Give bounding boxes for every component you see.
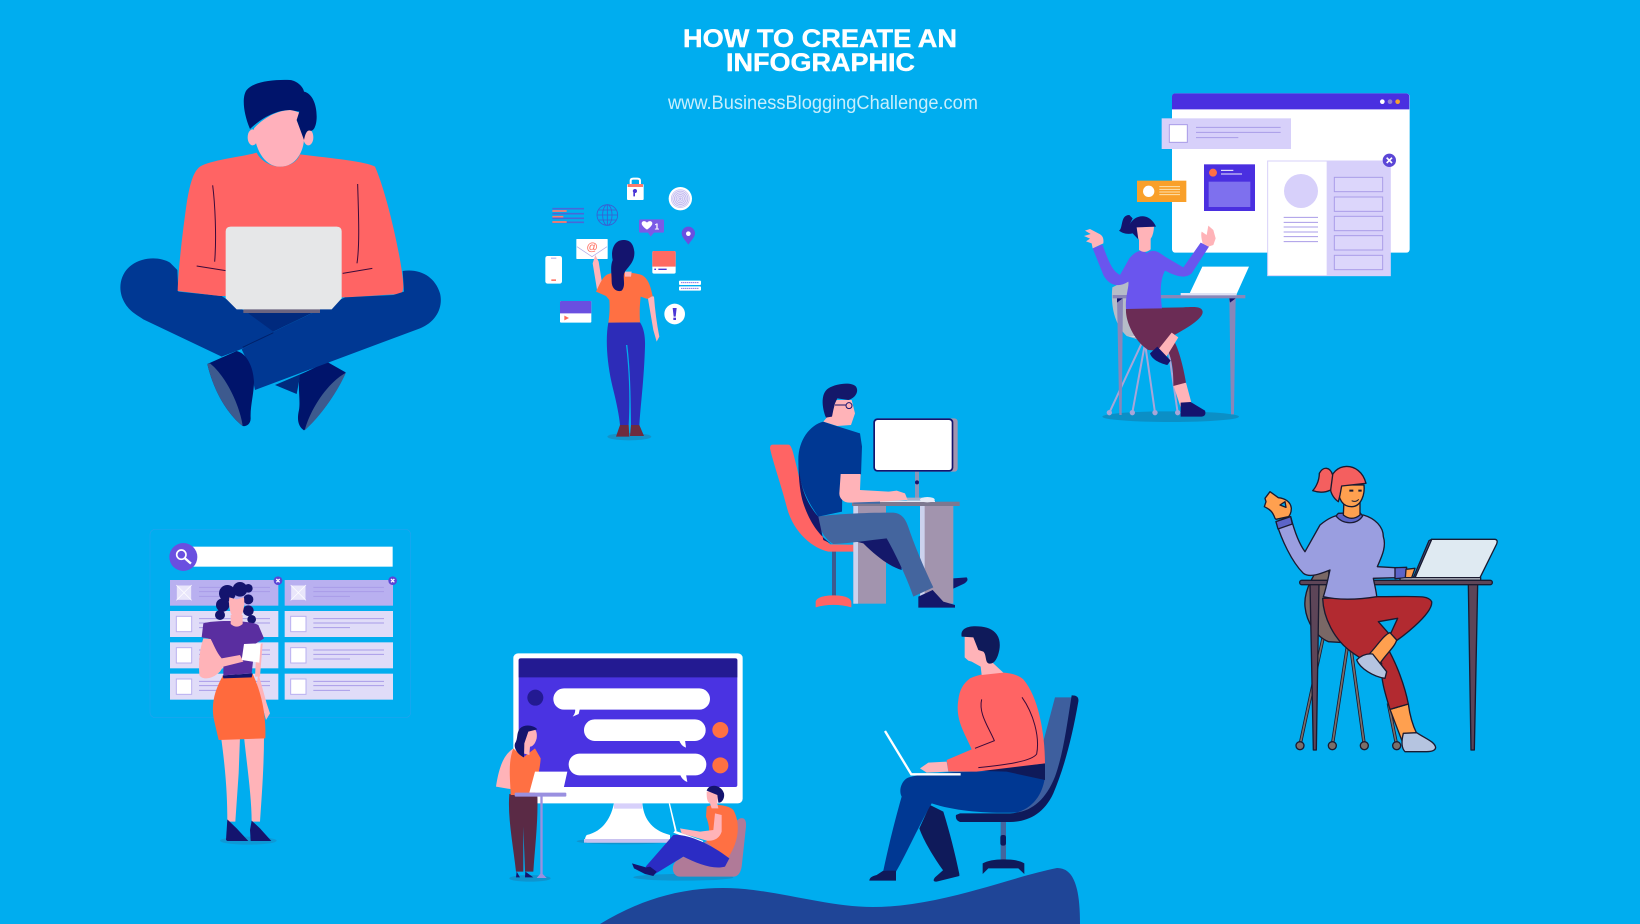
lavender strip card bbox=[1162, 118, 1291, 149]
desk bbox=[852, 502, 960, 604]
wave shape at bottom bbox=[600, 868, 1080, 924]
icon: globe bbox=[597, 205, 618, 225]
purple card bbox=[1204, 164, 1255, 211]
waist bbox=[973, 763, 1045, 780]
illustration: woman with search results panel bbox=[150, 529, 411, 845]
icon: map pin bbox=[682, 227, 695, 245]
icon: fingerprint bbox=[669, 187, 692, 210]
panel outline bbox=[150, 529, 411, 718]
illustration: chat monitor with two people bbox=[496, 653, 746, 882]
sweater crease lines bbox=[197, 184, 372, 273]
chair bbox=[1296, 557, 1401, 750]
woman bbox=[199, 582, 277, 845]
illustration: man at desktop computer bbox=[770, 384, 967, 608]
row text lines bbox=[199, 587, 384, 690]
hand bbox=[920, 762, 948, 773]
hair bbox=[244, 80, 317, 140]
shadowed inner leg bbox=[243, 312, 330, 394]
laptop bbox=[1400, 539, 1497, 580]
illustration: outlined woman at laptop bbox=[1264, 466, 1497, 752]
icon: envelope bbox=[576, 239, 608, 259]
back leg bbox=[919, 805, 959, 882]
front shoe bbox=[869, 871, 896, 881]
icon: phone bbox=[545, 256, 562, 284]
title: HOW TO CREATE AN bbox=[683, 25, 957, 53]
icon: envelope: @ bbox=[586, 241, 598, 253]
left shoe bbox=[207, 351, 254, 426]
sitting man with laptop bbox=[632, 786, 746, 881]
right shoe bbox=[298, 362, 346, 430]
red chair bbox=[770, 445, 873, 607]
title: INFOGRAPHIC bbox=[726, 49, 915, 77]
icon: video card bbox=[560, 301, 591, 323]
desk bbox=[1300, 580, 1492, 750]
standing woman at lectern bbox=[496, 726, 567, 882]
result rows bbox=[170, 580, 393, 700]
chat bubbles bbox=[553, 688, 710, 782]
leg going left bbox=[242, 271, 441, 390]
orange notification bbox=[1137, 181, 1186, 202]
sweater bbox=[947, 672, 1045, 772]
far foot bbox=[953, 577, 967, 589]
icon: text lines bbox=[552, 209, 584, 222]
website address: www.BusinessBloggingChallenge.com bbox=[667, 93, 978, 114]
woman figure bbox=[593, 240, 659, 440]
woman bbox=[1084, 215, 1216, 417]
laptop bbox=[885, 731, 961, 774]
head bbox=[965, 637, 1003, 675]
monitor frame bbox=[513, 653, 743, 803]
browser window bbox=[1172, 93, 1410, 253]
icon: padlock bbox=[627, 179, 644, 200]
illustration: woman at desk with browser window bbox=[1084, 93, 1410, 422]
woman bbox=[1264, 466, 1436, 752]
illustration: man sitting cross-legged with laptop bbox=[120, 80, 441, 430]
illustration: man in office chair with laptop bbox=[869, 626, 1078, 882]
front leg bbox=[883, 771, 1045, 872]
desk bbox=[1113, 295, 1245, 415]
close badges bbox=[274, 576, 397, 585]
chair bbox=[1107, 278, 1180, 415]
curly hair bbox=[215, 582, 256, 624]
man bbox=[798, 384, 955, 608]
stand bbox=[577, 803, 670, 844]
icon: alert bbox=[664, 304, 685, 324]
profile panel bbox=[1268, 161, 1390, 276]
shadow bbox=[1102, 411, 1239, 422]
avatars bbox=[527, 690, 728, 773]
icon: password fields bbox=[679, 281, 701, 291]
icon: salmon card bbox=[652, 251, 676, 274]
title bbox=[683, 25, 957, 77]
checkboxes bbox=[176, 585, 306, 694]
search bar bbox=[169, 543, 393, 571]
screen bbox=[519, 658, 737, 787]
illustration: woman with floating app icons bbox=[545, 179, 701, 440]
leg going right bbox=[120, 258, 273, 357]
office chair bbox=[956, 695, 1078, 874]
laptop bbox=[243, 309, 320, 313]
sweater bbox=[178, 153, 403, 297]
monitor bbox=[873, 418, 958, 502]
icon: like bubble: 1 bbox=[654, 221, 659, 231]
close badge bbox=[1383, 154, 1396, 167]
ears and face bbox=[248, 129, 258, 145]
laptop bbox=[1181, 267, 1249, 295]
icon: like bubble bbox=[639, 219, 664, 237]
